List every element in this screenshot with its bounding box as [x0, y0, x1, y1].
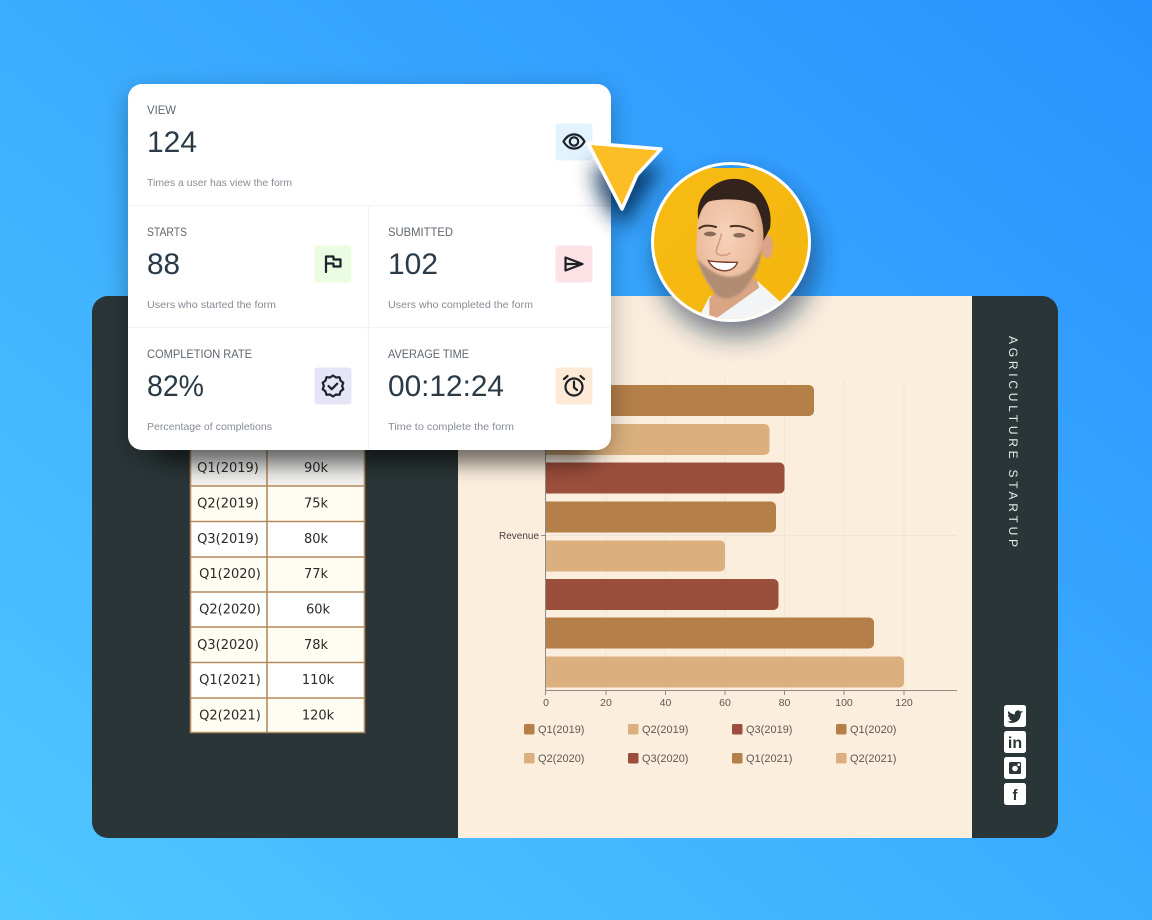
- stat: view: Times a user has view the form: [147, 177, 292, 189]
- stat: view: 124: [147, 126, 197, 159]
- panel: dark infographic sheet: [92, 296, 1058, 838]
- table: revenue by quarter: 78k: [304, 638, 329, 653]
- chart legend: Q3(2020): [642, 753, 688, 765]
- table: revenue by quarter: 80k: [304, 532, 329, 547]
- table: revenue by quarter: 60k: [306, 602, 331, 618]
- stat: submitted: 102: [388, 248, 438, 281]
- stat: starts: 88: [147, 248, 180, 281]
- chart legend: [524, 724, 896, 765]
- x axis numbers: 120: [895, 697, 913, 709]
- cursor arrow: [588, 143, 665, 228]
- table: revenue by quarter: Q1(2021): [199, 673, 261, 688]
- table: revenue by quarter: 90k: [304, 461, 329, 476]
- stat: average time: [388, 349, 592, 433]
- chart legend: Q1(2020): [850, 724, 896, 736]
- x axis numbers: 20: [600, 697, 612, 709]
- icon: send: [556, 246, 592, 282]
- stat: completion rate: [147, 349, 352, 433]
- x axis numbers: [543, 697, 913, 709]
- bar chart: revenue: [458, 380, 957, 709]
- stat: starts: STARTS: [147, 227, 187, 239]
- face: [696, 199, 764, 294]
- stat: completion rate: Percentage of completions: [147, 421, 272, 433]
- table: revenue by quarter: 110k: [302, 673, 335, 688]
- x axis numbers: 0: [543, 697, 549, 709]
- stat: submitted: [388, 227, 592, 311]
- stat: view: VIEW: [147, 105, 176, 117]
- chart legend: Q2(2021): [850, 753, 896, 765]
- shirt: [701, 282, 780, 319]
- icon: eye: [556, 124, 592, 160]
- icon: facebook: f: [1012, 787, 1018, 804]
- icon: flag: [314, 246, 352, 282]
- table: revenue by quarter: Q2(2020): [199, 602, 261, 618]
- vertical title: Agriculture Startup: AGRICULTURE STARTUP: [1006, 336, 1020, 547]
- chart legend: Q3(2019): [746, 724, 792, 736]
- table: revenue by quarter: 77k: [304, 567, 329, 582]
- icon: instagram: [1004, 757, 1026, 779]
- stat: starts: [147, 227, 352, 311]
- table: revenue by quarter: Q2(2021): [199, 708, 261, 724]
- chart legend: Q2(2019): [642, 724, 688, 736]
- icon: twitter: [1004, 705, 1026, 727]
- avatar: smiling man portrait: [650, 160, 815, 328]
- panel: cream chart area: [458, 296, 972, 838]
- chart legend: Q2(2020): [538, 753, 584, 765]
- eyes: [704, 232, 716, 236]
- stat: submitted: Users who completed the form: [388, 299, 533, 311]
- x axis numbers: 40: [660, 697, 671, 709]
- table: revenue by quarter: Q1(2020): [199, 567, 261, 582]
- hair: [698, 179, 771, 241]
- icon: alarm clock: [556, 368, 592, 404]
- mouth: [708, 261, 737, 271]
- table: revenue by quarter: [190, 450, 365, 733]
- table: revenue by quarter: 75k: [304, 496, 329, 512]
- stat: average time: 00:12:24: [388, 370, 504, 403]
- nose: [716, 233, 730, 255]
- chart legend: Q1(2019): [538, 724, 584, 736]
- x axis numbers: 80: [779, 697, 790, 709]
- stat: starts: Users who started the form: [147, 299, 276, 311]
- x axis numbers: 100: [835, 697, 853, 709]
- axis label: Revenue: Revenue: [499, 530, 539, 542]
- table: revenue by quarter: Q1(2019): [197, 461, 259, 476]
- panel: form statistics card: [128, 84, 611, 463]
- stat: view: [147, 105, 592, 189]
- icon: verified badge: [314, 368, 352, 404]
- x axis numbers: 60: [719, 697, 731, 709]
- table: revenue by quarter: Q3(2020): [197, 638, 259, 653]
- stat: completion rate: COMPLETION RATE: [147, 349, 252, 361]
- ear: [762, 235, 773, 259]
- brows: [699, 226, 753, 231]
- table: revenue by quarter: Q3(2019): [197, 532, 259, 547]
- stat: completion rate: 82%: [147, 370, 204, 403]
- social icons: [1004, 705, 1026, 805]
- chart legend: Q1(2021): [746, 753, 792, 765]
- table: revenue by quarter: Q2(2019): [197, 496, 259, 512]
- stat: average time: AVERAGE TIME: [388, 349, 469, 361]
- icon: linkedin: in: [1008, 735, 1022, 752]
- table: revenue by quarter: 120k: [302, 708, 335, 724]
- stat: average time: Time to complete the form: [388, 421, 514, 433]
- beard: [697, 248, 762, 298]
- stat: submitted: SUBMITTED: [388, 227, 453, 239]
